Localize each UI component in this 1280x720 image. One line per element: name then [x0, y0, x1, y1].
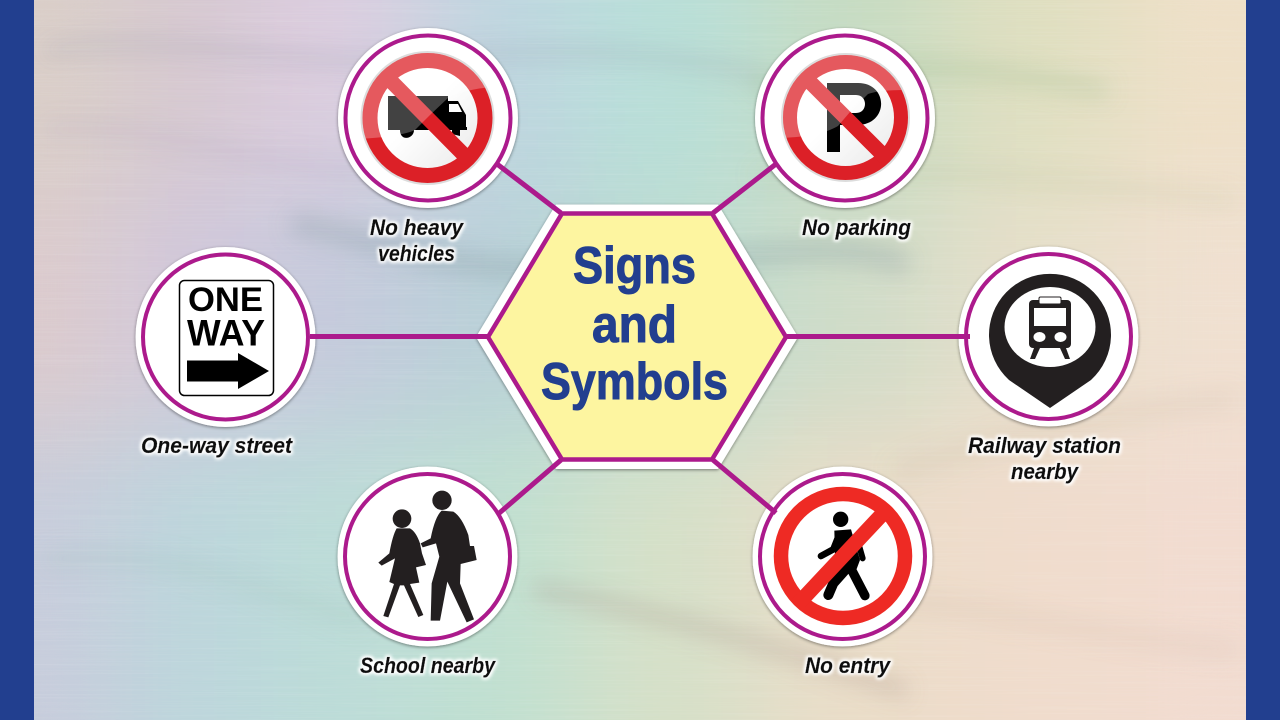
sign: no entry: [760, 474, 925, 639]
label: railway station nearby: nearby: [1011, 459, 1080, 484]
icon: arrow: [187, 353, 269, 389]
title: Symbols: [541, 353, 728, 411]
icon: truck: [388, 96, 467, 138]
icon: letter P: [827, 83, 881, 152]
label: school nearby: School nearby: [360, 653, 497, 678]
icon: walking person: [821, 512, 865, 596]
left border bar: [0, 0, 34, 720]
label: one-way street: One-way street: [141, 433, 294, 458]
label: no heavy vehicles: [370, 215, 465, 266]
icon: train: [1029, 297, 1071, 359]
sign: no parking: [762, 36, 928, 200]
sign: one way: ONE: [188, 281, 263, 319]
label: railway station nearby: Railway station: [968, 433, 1121, 458]
label: no parking: No parking: [802, 215, 912, 240]
label: no heavy vehicles: No heavy: [370, 215, 465, 240]
sign: one way: WAY: [187, 312, 265, 354]
icon: map pin: [989, 274, 1111, 408]
label: no heavy vehicles: vehicles: [378, 241, 455, 266]
label: no entry: No entry: [805, 653, 892, 678]
white circle backings: [136, 28, 1138, 646]
title: Signs: [573, 237, 696, 295]
sign: school nearby: [345, 474, 510, 639]
title: and: [592, 296, 677, 354]
central hexagon: [488, 214, 786, 460]
icon: two walking people: [378, 491, 477, 622]
connector lines: [310, 164, 970, 515]
sign: railway station: [966, 254, 1131, 419]
sign: no heavy vehicles: [346, 36, 510, 200]
label: railway station nearby: [968, 433, 1121, 484]
white hexagon backing: [476, 204, 798, 469]
title: [541, 237, 728, 411]
right border bar: [1246, 0, 1280, 720]
sign: one way: [143, 254, 308, 420]
